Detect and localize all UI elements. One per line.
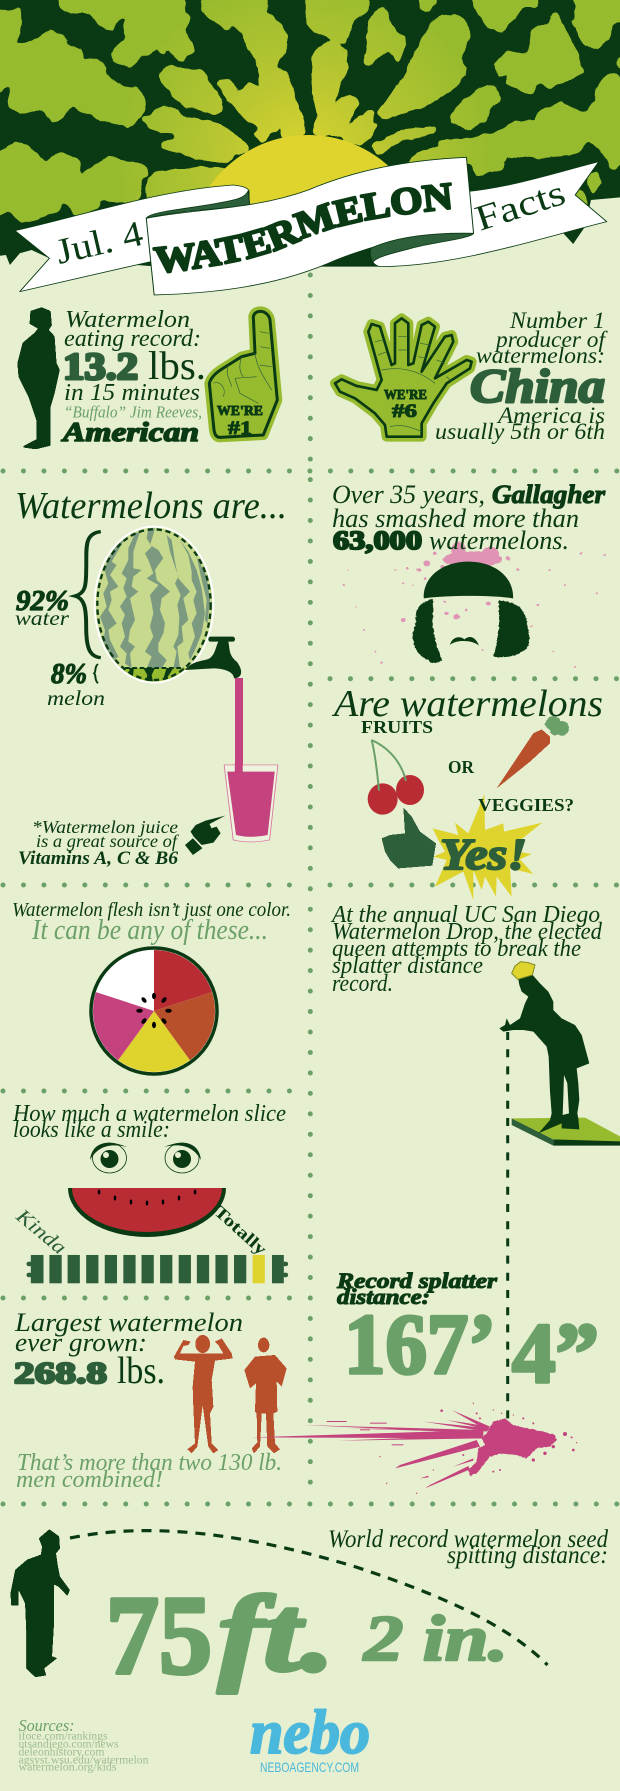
panel: watermelons are water: Watermelons are... [15,485,287,527]
panel: largest watermelon: lbs. [117,1350,165,1392]
panel: fruits or veggies: VEGGIES? [478,795,574,815]
dotted dividers [3,275,620,1504]
panel: eating record: American [61,417,199,447]
icon: yellow burst [433,794,542,900]
panel: gallagher: 63,000 [333,526,422,555]
panel: flesh color: Watermelon flesh isn’t just one color. [12,899,291,921]
panel: queen drop: queen attempts to break the [332,936,581,962]
vitamins note [18,817,180,869]
panel: seed spitting: 75 [106,1574,212,1698]
panel: queen drop: record. [332,971,393,997]
panel: queen drop: splatter distance [332,953,483,979]
arrow: drop line [506,1032,509,1438]
icon: foam hand we're #6 [335,318,472,437]
panel: fruits or veggies: OR [448,757,475,777]
panel: seed spitting: 2 in. [363,1603,508,1675]
panel: largest watermelon: 268.8 [14,1355,107,1390]
panel: smile scale: Kinda [11,1204,70,1259]
record splatter distance: distance: [337,1284,430,1309]
record splatter distance [336,1268,599,1401]
panel: watermelons are water: melon [47,686,105,710]
panel: eating record: Watermelon [65,307,190,333]
pink splatter [252,1403,577,1494]
arrow: seed trajectory [70,1531,548,1665]
panel: smile scale [11,1101,288,1283]
icon: pointing hand [185,816,225,855]
panel: gallagher: Gallagher [492,480,606,509]
panel: flesh color [12,899,291,1074]
icon: foam finger we're #1: #1 [228,418,252,439]
panel: largest watermelon [14,1308,287,1493]
sources: Sources: [18,1716,74,1735]
panel: gallagher: has smashed more than [332,504,579,533]
panel: watermelons are water [15,485,287,710]
panel: fruits or veggies: Are watermelons [331,683,603,725]
panel: fruits or veggies: FRUITS [361,717,433,737]
panel: eating record [19,307,206,448]
panel: largest watermelon: ever grown: [15,1328,147,1357]
ribbon banner [15,157,607,295]
panel: top producer: America is [496,403,605,428]
icon: foam hand we're #6: #6 [392,401,417,422]
pie chart: flesh colors [91,948,217,1074]
panel: flesh color: It can be any of these... [31,915,268,946]
panel: queen drop [330,902,620,1438]
sources: deleonhistory.com [18,1744,105,1758]
icon: foam finger we're #1: WE'RE [217,404,263,419]
icon: man spitting [11,1530,69,1677]
sources: utsandiego.com/news [18,1736,119,1750]
icon: two men [174,1335,287,1453]
panel: smile scale: Totally [210,1202,271,1259]
logo: nebo: NEBOAGENCY.COM [260,1759,359,1775]
scale bar [26,1255,288,1283]
panel: top producer: China [470,360,605,413]
ribbon text: Facts: Facts [470,172,570,239]
panel: fruits or veggies: Yes! [440,830,527,879]
vitamins note: Vitamins A, C & B6 [18,848,179,869]
icon: cherries [368,740,424,815]
panel: fruits or veggies [331,683,603,900]
panel: eating record: 13.2 [63,346,138,388]
panel: largest watermelon: That’s more than two 130 lb. [17,1450,282,1476]
icon: watermelon keg with faucet [95,527,241,685]
icon: glass of juice [224,763,278,842]
vitamins note: *Watermelon juice [32,817,178,837]
panel: top producer: producer of [494,327,609,352]
panel: seed spitting [11,1526,608,1698]
sources: ifoce.com/rankings [18,1728,108,1742]
record splatter distance: Record splatter [336,1268,497,1293]
panel: eating record: “Buffalo” Jim Reeves, [64,402,202,422]
ribbon text: WATERMELON: WATERMELON [152,182,452,274]
pink splatter [343,542,606,668]
header: watermelon rind background [0,0,620,267]
panel: eating record: lbs. [148,343,206,388]
icon: gallagher hair and moustache [413,562,529,663]
panel: seed spitting: spitting distance: [447,1542,608,1569]
sun [210,135,388,204]
panel: smile scale: How much a watermelon slice [12,1101,286,1127]
panel: gallagher: Over 35 years, [332,480,485,509]
icon: faucet [185,637,241,678]
icon: queen on platform [499,962,620,1146]
panel: smile scale: looks like a smile: [13,1117,170,1143]
panel: top producer: watermelons: [476,343,605,368]
sources: watermelon.org/kids [18,1760,117,1774]
panel: eating record: in 15 minutes [64,380,200,406]
icon: watermelon slice smile [68,1188,226,1237]
icon: foam finger we're #1 [209,311,277,439]
panel: queen drop: At the annual UC San Diego [330,902,600,928]
icon: juice stream [235,678,243,773]
vitamins note: is a great source of [36,831,180,851]
panel: top producer: Number 1 [509,308,605,333]
panel: queen drop: Watermelon Drop, the elected [332,919,603,945]
sources [18,1716,148,1774]
panel: gallagher: watermelons. [429,526,569,555]
icon: foam hand we're #6: WE'RE [384,388,427,403]
panel: eating record: eating record: [64,326,201,352]
panel: seed spitting: ft. [218,1575,335,1694]
icon: heavy man silhouette [19,308,59,448]
panel: top producer [435,308,609,444]
icon: braces [75,532,101,683]
sources: agsyst.wsu.edu/watermelon [18,1752,148,1766]
icon: carrot [497,716,569,788]
record splatter distance: 4” [512,1305,599,1401]
ribbon text: Jul. 4: Jul. 4 [52,213,147,272]
panel: watermelons are water: 92% [16,586,69,617]
panel: largest watermelon: Largest watermelon [14,1308,243,1337]
panel: gallagher [332,480,606,668]
panel: watermelons are water: water [15,606,70,630]
record splatter distance: 167’ [344,1296,496,1392]
logo: nebo: nebo [250,1699,370,1767]
icon: eyes [90,1143,201,1173]
panel: top producer: usually 5th or 6th [435,419,605,444]
panel: largest watermelon: men combined! [16,1467,163,1493]
icon: thumbs up [382,807,436,868]
panel: watermelons are water: 8% [51,659,87,690]
